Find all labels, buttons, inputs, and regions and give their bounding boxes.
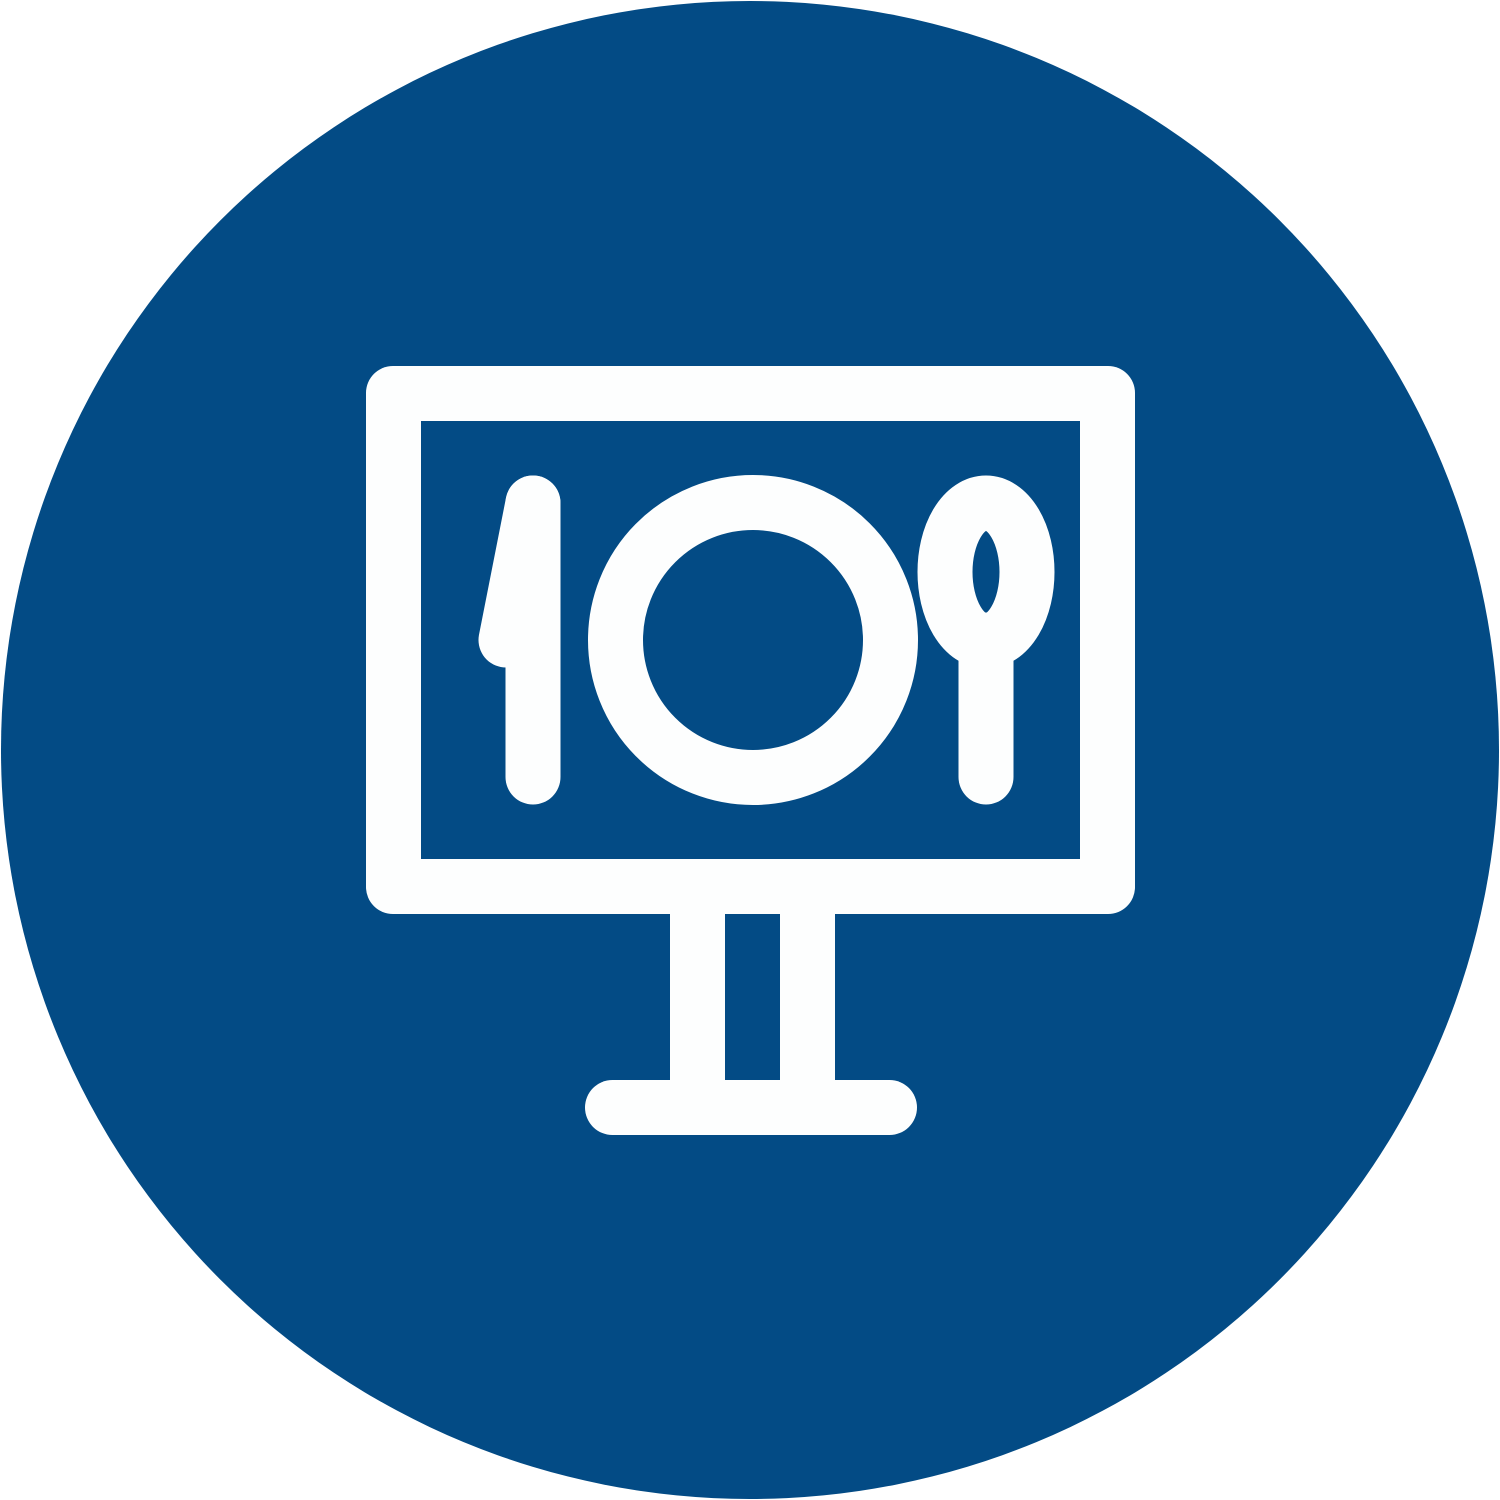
stand <box>585 900 917 1135</box>
plate <box>616 502 890 778</box>
knife <box>506 503 533 777</box>
monitor frame <box>366 366 1135 914</box>
spoon <box>945 503 1027 777</box>
